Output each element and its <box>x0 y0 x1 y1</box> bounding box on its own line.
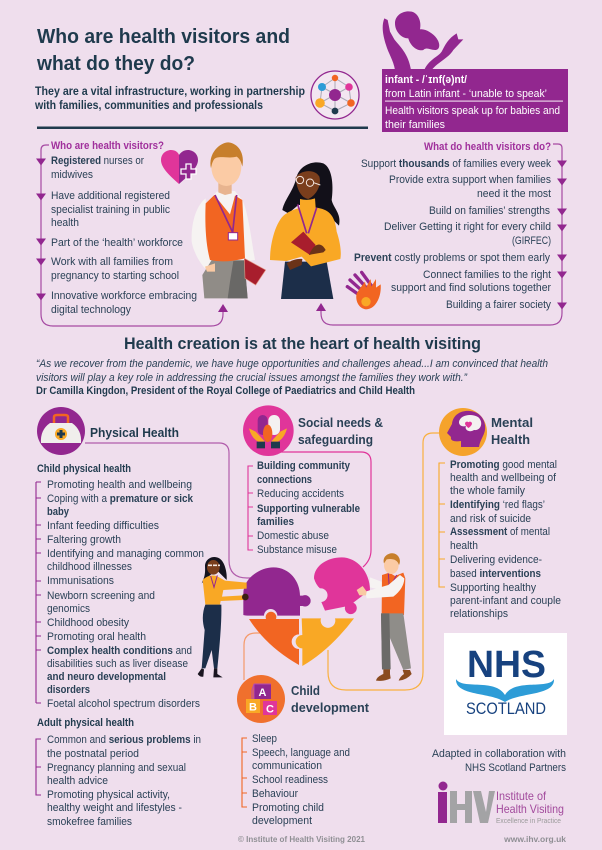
list: child: and neuro developmental <box>47 671 166 683</box>
panel: what do health visitors do <box>316 141 567 325</box>
logo: Institute of Health Visiting: Health Visiting <box>496 802 564 816</box>
icon: baby in hands <box>383 11 463 70</box>
list: child: disorders <box>47 684 90 696</box>
list: child: Immunisations <box>47 575 115 587</box>
list: connections <box>257 474 312 486</box>
list: adult: healthy weight and lifestyles - <box>47 802 182 814</box>
list: School readiness <box>252 774 329 786</box>
list <box>252 733 350 827</box>
list: health <box>51 217 79 229</box>
list: adult: health advice <box>47 775 108 787</box>
list: adult: the postnatal period <box>47 748 139 760</box>
list <box>51 155 197 316</box>
heading <box>291 683 370 715</box>
list: Building community <box>257 460 350 472</box>
footer: copyright: © Institute of Health Visiting 2021 <box>238 834 365 844</box>
list: Provide extra support when families <box>389 174 552 186</box>
footer: website: www.ihv.org.uk <box>503 834 566 844</box>
list: Identifying ‘red flags’ <box>450 499 545 511</box>
list: child: Coping with a premature or sick <box>47 493 194 505</box>
list: child: Infant feeding difficulties <box>47 520 160 532</box>
illustration: male health visitor <box>192 142 266 298</box>
subtitle <box>34 85 305 112</box>
heading: Who are health visitors? <box>51 140 164 152</box>
list: digital technology <box>51 304 132 316</box>
list: health and wellbeing of <box>450 472 557 484</box>
list: Registered nurses or <box>51 155 144 167</box>
list <box>257 460 360 556</box>
credit text: NHS Scotland Partners <box>465 762 566 774</box>
list <box>450 459 561 620</box>
heading: safeguarding <box>298 432 373 447</box>
list: Innovative workforce embracing <box>51 290 197 302</box>
icon: heart with cross <box>161 150 198 184</box>
heading: Physical Health <box>90 425 179 440</box>
icon: alphabet blocks: A <box>259 687 267 699</box>
subtitle: with families, communities and professionals <box>34 99 263 112</box>
list: Prevent costly problems or spot them early <box>354 252 551 264</box>
panel: infant definition: infant - /ˈɪnf(ə)nt/ <box>385 74 467 86</box>
illustration: female health visitor <box>270 162 341 299</box>
list: midwives <box>51 169 94 181</box>
list: child: childhood illnesses <box>47 561 133 573</box>
icon: alphabet blocks: C <box>266 704 274 716</box>
list: Assessment of mental <box>450 526 550 538</box>
title: Who are health visitors and <box>37 25 290 48</box>
list: Sleep <box>252 733 277 745</box>
list: specialist training in public <box>51 204 171 216</box>
list: the whole family <box>450 485 526 497</box>
list: adult: smokefree families <box>47 816 133 828</box>
icon: partnership network <box>311 71 359 119</box>
connector lines <box>85 433 441 690</box>
heading: Child <box>291 683 320 698</box>
icon: alphabet blocks <box>237 675 285 723</box>
list: child: Complex health conditions and <box>47 645 192 657</box>
quote: visitors will play a key role in addressing the crucial issues amongst the families they work with.” <box>36 372 467 384</box>
list: child: disabilities such as liver disease <box>47 658 188 670</box>
heading: health creation: Health creation is at the heart of health visiting <box>124 335 481 353</box>
bracket <box>248 466 253 550</box>
list: child: genomics <box>47 603 90 615</box>
credit text: Adapted in collaboration with <box>432 748 566 760</box>
illustration: small woman with puzzle <box>198 557 249 677</box>
list: child: Faltering growth <box>47 534 121 546</box>
illustration: small man with puzzle <box>357 553 412 681</box>
subheading: child: Child physical health <box>37 463 131 475</box>
heading <box>298 415 383 447</box>
list: Building a fairer society <box>446 299 552 311</box>
icon: helping hands <box>347 272 381 309</box>
list: Domestic abuse <box>257 530 329 542</box>
icon: medical bag <box>37 407 85 455</box>
illustration: jigsaw heart <box>243 557 370 666</box>
subheading: adult: Adult physical health <box>37 717 134 729</box>
panel: infant definition: from Latin infant - ‘unable to speak’ <box>385 88 547 100</box>
flow arrow right <box>316 144 567 325</box>
flow arrow left <box>36 145 228 326</box>
list: adult: Promoting physical activity, <box>47 789 170 801</box>
list: Promoting child <box>252 802 324 814</box>
logo: Institute of Health Visiting: Institute of <box>496 789 547 803</box>
logo: NHS Scotland <box>444 633 567 735</box>
panel: infant definition: Health visitors speak up for babies and <box>385 105 560 117</box>
heading: Health <box>491 432 530 447</box>
list: Speech, language and <box>252 747 350 759</box>
icon: alphabet blocks: B <box>249 702 257 714</box>
list: Have additional registered <box>51 190 170 202</box>
list: child: Promoting health and wellbeing <box>47 479 192 491</box>
heading: What do health visitors do? <box>424 141 551 153</box>
panel: who are health visitors <box>36 140 228 326</box>
bracket <box>36 482 41 703</box>
icon: head with heart <box>439 408 487 456</box>
list: relationships <box>450 608 509 620</box>
list: Supporting healthy <box>450 582 537 594</box>
quote: Dr Camilla Kingdon, President of the Royal College of Paediatrics and Child Health <box>36 385 415 397</box>
quote <box>36 358 548 397</box>
list: Behaviour <box>252 788 298 800</box>
list: child: Identifying and managing common <box>47 548 204 560</box>
list: Connect families to the right <box>423 269 551 281</box>
list: Reducing accidents <box>257 488 344 500</box>
list: Build on families’ strengths <box>429 205 551 217</box>
list: adult <box>47 734 201 828</box>
panel: physical health <box>36 407 204 828</box>
list: pregnancy to starting school <box>51 270 179 282</box>
list: need it the most <box>477 188 551 200</box>
list: support and find solutions together <box>391 282 551 294</box>
list: (GIRFEC) <box>512 235 551 247</box>
panel: mental health <box>439 408 561 620</box>
bracket <box>36 739 41 795</box>
list: Promoting good mental <box>450 459 557 471</box>
bracket <box>242 738 247 807</box>
list: development <box>252 815 312 827</box>
panel: social needs and safeguarding <box>243 405 383 556</box>
list: child <box>47 479 204 710</box>
list: child: Foetal alcohol spectrum disorders <box>47 698 201 710</box>
panel: child development <box>237 675 370 827</box>
list: parent-infant and couple <box>450 595 561 607</box>
logo: NHS Scotland: NHS <box>467 644 546 686</box>
panel: infant definition: their families <box>385 119 446 131</box>
list: Supporting vulnerable <box>257 503 360 515</box>
logo: Institute of Health Visiting: Excellence in Practice <box>496 816 561 825</box>
list: Substance misuse <box>257 544 337 556</box>
list: Part of the ‘health’ workforce <box>51 237 183 249</box>
title <box>36 25 290 75</box>
subtitle: They are a vital infrastructure, working in partnership <box>35 85 305 98</box>
list: child: Promoting oral health <box>47 631 146 643</box>
heading: development <box>291 700 370 715</box>
heading: Social needs & <box>298 415 383 430</box>
logo: Institute of Health Visiting <box>438 782 564 825</box>
list: based interventions <box>450 568 541 580</box>
list <box>354 158 552 311</box>
icon: community figures <box>243 405 294 456</box>
list: adult: Pregnancy planning and sexual <box>47 762 186 774</box>
panel: infant definition <box>382 69 568 132</box>
logo: NHS Scotland: SCOTLAND <box>466 700 546 718</box>
list: child: Childhood obesity <box>47 617 130 629</box>
quote: “As we recover from the pandemic, we have huge opportunities and challenges ahead...I am convinced that health <box>36 358 548 370</box>
list: Delivering evidence- <box>450 554 542 566</box>
list: adult: Common and serious problems in <box>47 734 201 746</box>
list: and risk of suicide <box>450 513 531 525</box>
list: health <box>450 540 478 552</box>
list: Work with all families from <box>51 256 173 268</box>
list: child: baby <box>47 506 69 518</box>
bracket <box>439 463 445 587</box>
list: Support thousands of families every week <box>361 158 552 170</box>
list: communication <box>252 760 322 772</box>
title: what do they do? <box>36 52 195 75</box>
list: Deliver Getting it right for every child <box>384 221 551 233</box>
list: child: Newborn screening and <box>47 590 155 602</box>
heading: Mental <box>491 415 533 430</box>
heading <box>491 415 533 447</box>
credit text <box>432 748 566 774</box>
list: families <box>257 516 294 528</box>
